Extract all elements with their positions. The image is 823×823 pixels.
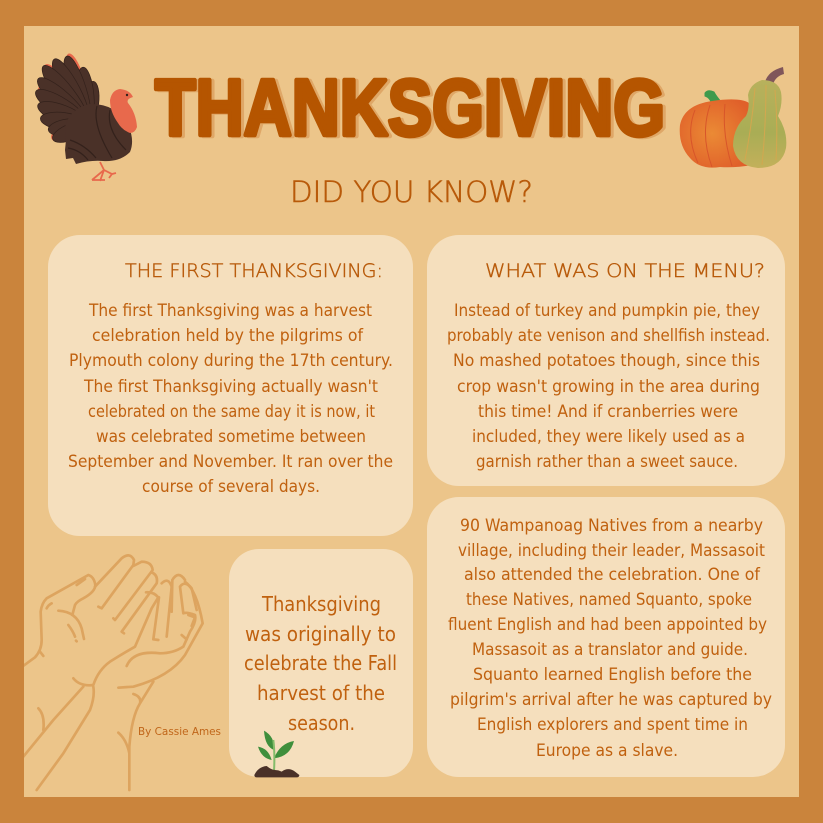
panel: the first Thanksgiving <box>48 235 413 536</box>
text block: Wampanoag body <box>448 516 772 761</box>
text block: Wampanoag body: 90 Wampanoag Natives from a nearby <box>460 516 763 536</box>
text block: Wampanoag body: Massasoit as a translator and guide. <box>472 640 748 660</box>
text block: harvest note <box>244 592 397 735</box>
text block: menu body: included, they were likely used as a <box>472 427 745 447</box>
text block: first Thanksgiving body: course of several days. <box>142 477 320 497</box>
icon: cupped hands <box>20 555 203 790</box>
text block: menu body: Instead of turkey and pumpkin pie, they <box>454 301 760 321</box>
text block: Wampanoag body: Squanto learned English before the <box>473 665 752 685</box>
text block: menu body: garnish rather than a sweet sauce. <box>476 452 738 472</box>
text block: first Thanksgiving body: celebration held by the pilgrims of <box>92 326 364 346</box>
subtitle: DID YOU KNOW? <box>290 175 533 209</box>
text block: Wampanoag body: these Natives, named Squanto, spoke <box>466 590 752 610</box>
text block: menu body: this time! And if cranberries were <box>478 402 738 422</box>
text block: harvest note: harvest of the <box>257 681 385 705</box>
text block: first Thanksgiving body: The first Thanksgiving was a harvest <box>88 301 372 321</box>
text block: menu body: crop wasn't growing in the area during <box>457 377 760 397</box>
text block: harvest note: celebrate the Fall <box>244 651 397 675</box>
heading: what was on the menu: WHAT WAS ON THE MENU? <box>485 260 765 282</box>
panel: harvest note <box>229 549 413 777</box>
credit: By Cassie Ames: By Cassie Ames <box>138 725 221 738</box>
text block: first Thanksgiving body: was celebrated sometime between <box>96 427 366 447</box>
text block: Wampanoag body: Europe as a slave. <box>536 741 678 761</box>
panel: what was on the menu <box>427 235 785 486</box>
text block: Wampanoag body: village, including their leader, Massasoit <box>458 541 765 561</box>
text block: Wampanoag body: fluent English and had been appointed by <box>448 615 767 635</box>
text block: first Thanksgiving body: The first Thanksgiving actually wasn't <box>83 377 378 397</box>
heading: the first Thanksgiving: THE FIRST THANKSGIVING: <box>125 260 383 282</box>
text block: harvest note: season. <box>288 711 355 735</box>
title: THANKSGIVING <box>155 63 665 152</box>
text block: first Thanksgiving body: celebrated on the same day it is now, it <box>88 402 375 422</box>
text block: Wampanoag body: pilgrim's arrival after he was captured by <box>450 690 772 710</box>
text block: first Thanksgiving body: September and November. It ran over the <box>68 452 393 472</box>
text block: menu body <box>447 301 770 472</box>
text block: first Thanksgiving body <box>68 301 393 497</box>
text block: menu body: probably ate venison and shellfish instead. <box>447 326 770 346</box>
panel: Wampanoag Natives <box>427 497 785 777</box>
text block: Wampanoag body: also attended the celebration. One of <box>464 565 761 585</box>
icon: pumpkin and gourd <box>680 67 786 168</box>
icon: sprout <box>254 731 299 777</box>
text block: Wampanoag body: English explorers and spent time in <box>477 715 748 735</box>
title: THANKSGIVING <box>158 64 668 153</box>
text block: menu body: No mashed potatoes though, since this <box>453 351 760 371</box>
text block: harvest note: was originally to <box>245 622 396 646</box>
text block: first Thanksgiving body: Plymouth colony during the 17th century. <box>69 351 393 371</box>
icon: turkey <box>31 51 137 181</box>
text block: harvest note: Thanksgiving <box>261 592 381 616</box>
